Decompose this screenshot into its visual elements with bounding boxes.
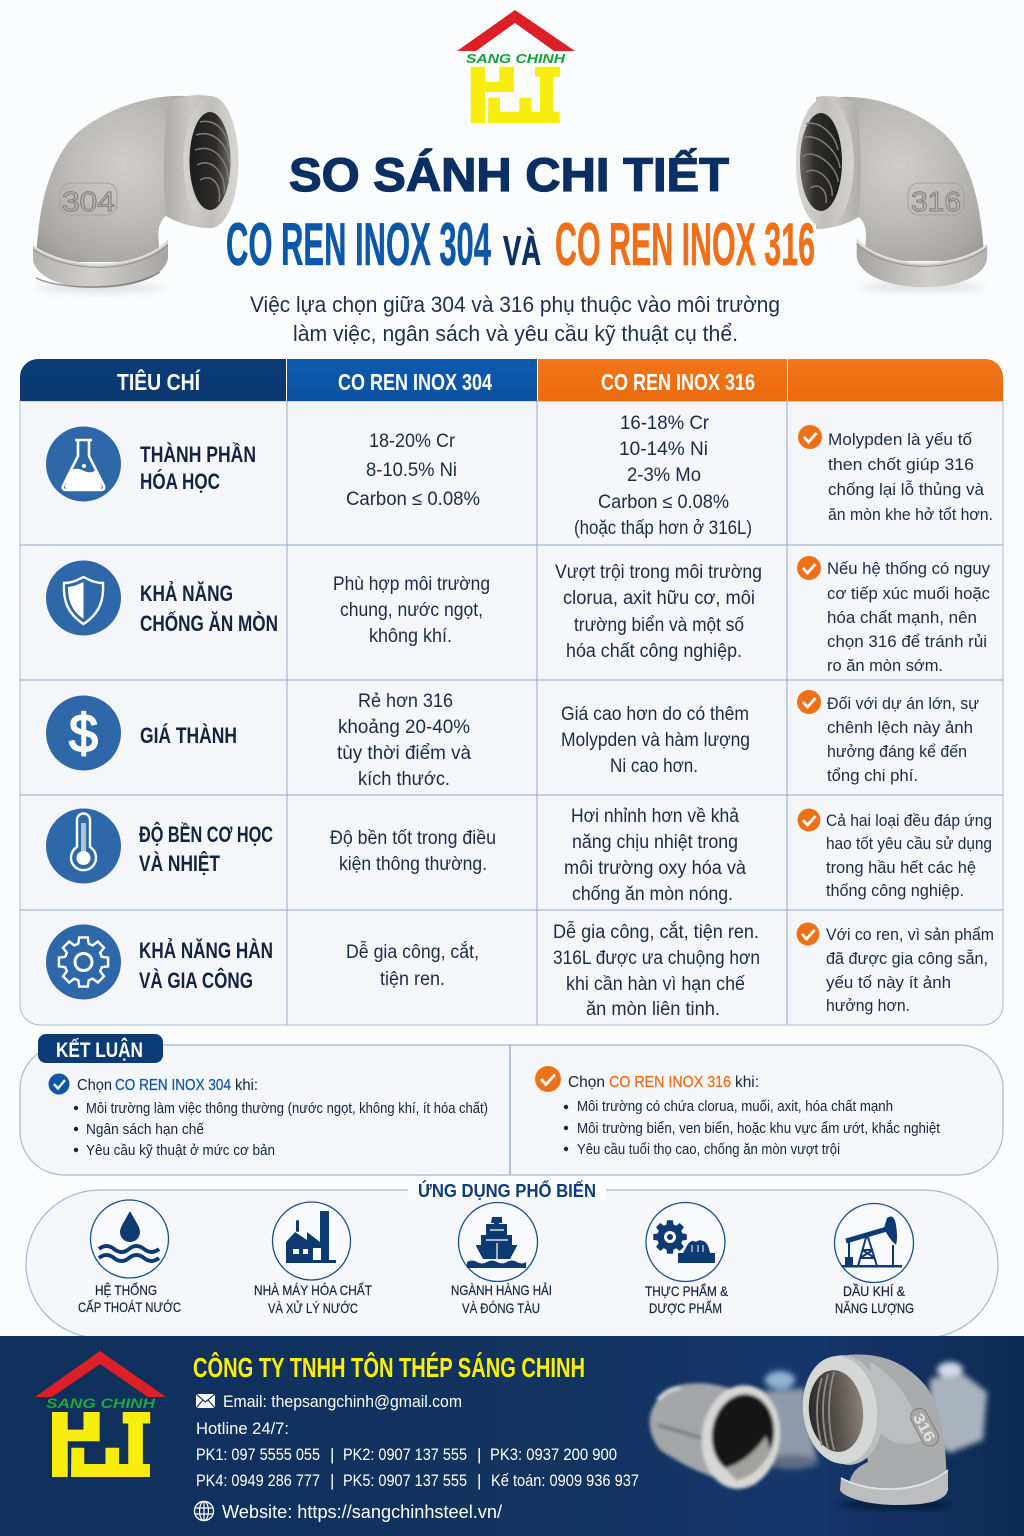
note with check: đã được gia công sẵn, (826, 949, 988, 968)
title: VÀ (503, 227, 541, 274)
row: khả năng hàn và gia công: Dễ gia công, cắt, (346, 941, 479, 963)
company name: CÔNG TY TNHH TÔN THÉP SÁNG CHINH (193, 1351, 585, 1383)
row: khả năng hàn và gia công: VÀ GIA CÔNG (139, 968, 253, 993)
note with check: tổng chi phí. (827, 766, 918, 785)
logo: Sang Chinh top (457, 10, 575, 123)
note with check: then chốt giúp 316 (828, 455, 974, 474)
note with check (797, 556, 990, 675)
application: ship: VÀ ĐÓNG TÀU (462, 1300, 540, 1316)
row: khả năng chống ăn mòn: không khí. (369, 626, 452, 647)
row: thành phần hóa học: THÀNH PHẦN (140, 442, 256, 467)
hotline: | (330, 1471, 334, 1490)
application: water: HỆ THỐNG (95, 1281, 157, 1298)
table header: CO REN INOX 304 (338, 369, 492, 395)
product photo: right elbow 316 (796, 96, 987, 290)
icon: thermometer (46, 808, 121, 884)
note with check: chống lại lỗ thủng và (828, 480, 985, 499)
website: Website: https://sangchinhsteel.vn/ (222, 1502, 502, 1522)
footer logo: SANG CHINH (46, 1395, 156, 1411)
row: giá thành: Rẻ hơn 316 (358, 691, 453, 712)
hotline: PK1: 097 5555 055 (196, 1445, 320, 1464)
email: Email: thepsangchinh@gmail.com (223, 1392, 462, 1411)
row: thành phần hóa học: 18-20% Cr (369, 431, 456, 452)
application: ship: NGÀNH HÀNG HẢI (451, 1282, 552, 1298)
row: độ bền cơ học và nhiệt (46, 806, 992, 905)
row: khả năng chống ăn mòn: clorua, axit hữu cơ, môi (563, 588, 755, 609)
comparison table (20, 359, 1003, 1025)
note with check (796, 922, 994, 1015)
row: thành phần hóa học (46, 413, 993, 539)
application: ship (451, 1202, 552, 1316)
logo: Sang Chinh top: SANG CHINH (466, 51, 566, 66)
note with check (798, 425, 993, 524)
conclusion: chọn 304: Ngân sách hạn chế (86, 1121, 205, 1138)
row: độ bền cơ học và nhiệt: ĐỘ BỀN CƠ HỌC (139, 822, 273, 847)
row: khả năng chống ăn mòn: CHỐNG ĂN MÒN (140, 610, 278, 636)
application: oil and energy (834, 1204, 914, 1316)
product photo: fittings on blue (650, 1351, 987, 1510)
row: độ bền cơ học và nhiệt: năng chịu nhiệt trong (572, 832, 738, 853)
row: khả năng chống ăn mòn: KHẢ NĂNG (140, 581, 233, 606)
note with check: Cả hai loại đều đáp ứng (826, 811, 992, 830)
table header: CO REN INOX 316 (601, 369, 755, 395)
row: khả năng chống ăn mòn (46, 556, 990, 675)
row: khả năng chống ăn mòn: chung, nước ngọt, (340, 600, 483, 621)
application: oil and energy: DẦU KHÍ & (843, 1283, 906, 1299)
hotline: | (477, 1471, 481, 1490)
application: factory: VÀ XỬ LÝ NƯỚC (268, 1299, 358, 1316)
footer (0, 1336, 1024, 1536)
row: giá thành: Molypden và hàm lượng (561, 730, 750, 751)
heading: kết luận (38, 1034, 163, 1063)
hotline: PK4: 0949 286 777 (196, 1471, 320, 1490)
application: oil and energy: NĂNG LƯỢNG (835, 1300, 914, 1316)
panel: kết luận (20, 1034, 1003, 1175)
blurred back fittings (650, 1362, 987, 1494)
row: độ bền cơ học và nhiệt: Hơi nhỉnh hơn về khả (571, 806, 739, 827)
note with check: Đối với dự án lớn, sự (827, 694, 979, 713)
conclusion: chọn 304: Chọn (77, 1077, 112, 1094)
row: khả năng hàn và gia công: ăn mòn liên tinh. (586, 999, 720, 1020)
note with check: Với co ren, vì sản phẩm (826, 925, 994, 944)
note with check: ăn mòn khe hở tốt hơn. (828, 505, 993, 524)
application: food and pharma (645, 1202, 729, 1316)
note with check: cơ tiếp xúc muối hoặc (827, 584, 990, 603)
row: giá thành (46, 690, 979, 790)
hotline (196, 1419, 639, 1490)
row: thành phần hóa học: Carbon ≤ 0.08% (598, 492, 729, 513)
row: khả năng hàn và gia công: KHẢ NĂNG HÀN (139, 938, 273, 963)
note with check: thống công nghiệp. (826, 881, 964, 900)
subtitle: làm việc, ngân sách và yêu cầu kỹ thuật cụ thể. (293, 321, 738, 346)
note with check (798, 808, 992, 900)
conclusion: chọn 316: Chọn (568, 1074, 605, 1091)
hotline: Kế toán: 0909 936 937 (491, 1471, 639, 1490)
main elbow: 316 (909, 1410, 938, 1445)
row: độ bền cơ học và nhiệt: VÀ NHIỆT (139, 851, 220, 876)
row: khả năng chống ăn mòn: Phù hợp môi trường (333, 574, 490, 595)
row: khả năng chống ăn mòn: Vượt trội trong môi trường (555, 562, 762, 583)
row: độ bền cơ học và nhiệt: kiện thông thường. (339, 854, 487, 875)
row: thành phần hóa học: 10-14% Ni (619, 439, 708, 460)
row: khả năng hàn và gia công: Dễ gia công, cắt, tiện ren. (553, 921, 759, 943)
conclusion: chọn 316: khi: (735, 1074, 759, 1091)
application: factory: NHÀ MÁY HÓA CHẤT (254, 1282, 372, 1298)
note with check: trong hầu hết các hệ (826, 858, 976, 877)
row: thành phần hóa học: (hoặc thấp hơn ở 316L) (574, 518, 752, 539)
product photo: right elbow 316: 316 (911, 186, 961, 217)
heading: kết luận: KẾT LUẬN (56, 1038, 143, 1062)
note with check: chênh lệch này ảnh (827, 718, 973, 737)
row: giá thành: Ni cao hơn. (610, 756, 698, 777)
heading: ỨNG DỤNG PHỔ BIẾN (418, 1180, 596, 1201)
row: giá thành: kích thước. (358, 769, 450, 790)
application: water: CẤP THOÁT NƯỚC (78, 1299, 181, 1315)
icon: dollar: $ (69, 704, 98, 764)
product photo: left elbow 304: 304 (62, 186, 115, 217)
conclusion: chọn 304 (48, 1074, 488, 1159)
conclusion: chọn 316: Yêu cầu tuổi thọ cao, chống ăn mòn vượt trội (577, 1141, 840, 1158)
note with check: Nếu hệ thống có nguy (827, 559, 990, 578)
title (226, 148, 815, 278)
hotline: | (330, 1445, 334, 1464)
row: thành phần hóa học: 2-3% Mo (627, 465, 701, 486)
icon: dollar (46, 696, 121, 770)
subtitle: Việc lựa chọn giữa 304 và 316 phụ thuộc vào môi trường (250, 292, 780, 317)
conclusion: chọn 304: CO REN INOX 304 (115, 1077, 231, 1094)
row: giá thành: khoảng 20-40% (338, 717, 470, 738)
icon: shield (46, 560, 121, 636)
conclusion: chọn 316: Môi trường biển, ven biển, hoặc khu vực ẩm ướt, khắc nghiệt (577, 1120, 941, 1137)
hotline: PK5: 0907 137 555 (343, 1471, 467, 1490)
row: thành phần hóa học: Carbon ≤ 0.08% (346, 489, 480, 510)
conclusion: chọn 316: Môi trường có chứa clorua, muối, axit, hóa chất mạnh (577, 1098, 893, 1115)
icon: gear (46, 924, 121, 1000)
note with check: chọn 316 để tránh rủi (827, 632, 987, 651)
conclusion: chọn 304: khi: (235, 1077, 258, 1094)
row: giá thành: tùy thời điểm và (337, 743, 471, 764)
application: food and pharma: THỰC PHẨM & (645, 1282, 729, 1299)
application: water (78, 1200, 181, 1315)
row: khả năng hàn và gia công: khi cần hàn vì hạn chế (566, 974, 745, 995)
table header: TIÊU CHÍ (117, 368, 201, 395)
row: độ bền cơ học và nhiệt: môi trường oxy hóa và (564, 858, 746, 879)
application: food and pharma: DƯỢC PHẨM (649, 1299, 722, 1316)
panel: ứng dụng phổ biến (26, 1180, 998, 1338)
hotline: PK3: 0937 200 900 (490, 1445, 617, 1464)
conclusion: chọn 316 (535, 1066, 941, 1158)
footer logo (35, 1351, 166, 1477)
note with check (797, 690, 979, 785)
main elbow (798, 1351, 951, 1510)
row: khả năng hàn và gia công: tiện ren. (380, 969, 445, 990)
note with check: hao tốt yêu cầu sử dụng (826, 834, 992, 853)
row: thành phần hóa học: 16-18% Cr (620, 413, 710, 434)
note with check: hưởng đáng kể đến (827, 742, 967, 761)
row: độ bền cơ học và nhiệt: chống ăn mòn nóng. (572, 884, 733, 905)
icon: flask (46, 426, 121, 502)
application: factory (254, 1202, 372, 1316)
row: khả năng hàn và gia công (46, 921, 994, 1020)
subtitle (250, 292, 780, 346)
note with check: hưởng hơn. (826, 996, 910, 1015)
conclusion: chọn 304: Môi trường làm việc thông thường (nước ngọt, không khí, ít hóa chất) (86, 1100, 488, 1117)
title: CO REN INOX 304 (226, 211, 491, 278)
hotline: | (477, 1445, 481, 1464)
row: thành phần hóa học: 8-10.5% Ni (366, 460, 457, 481)
row: độ bền cơ học và nhiệt: Độ bền tốt trong điều (330, 828, 496, 849)
title: SO SÁNH CHI TIẾT (289, 148, 729, 201)
table header (20, 359, 1003, 401)
note with check: ro ăn mòn sớm. (827, 656, 943, 675)
hotline: PK2: 0907 137 555 (343, 1445, 467, 1464)
product photo: left elbow 304 (33, 95, 238, 291)
row: giá thành: Giá cao hơn do có thêm (561, 704, 749, 725)
row: thành phần hóa học: HÓA HỌC (140, 469, 220, 494)
note with check: hóa chất mạnh, nên (827, 608, 977, 627)
row: giá thành: GIÁ THÀNH (140, 723, 237, 748)
note with check: Molypden là yếu tố (828, 430, 973, 449)
hotline: Hotline 24/7: (196, 1419, 289, 1438)
row: khả năng chống ăn mòn: hóa chất công nghiệp. (566, 641, 742, 662)
conclusion: chọn 316: CO REN INOX 316 (609, 1074, 731, 1091)
row: khả năng hàn và gia công: 316L được ưa chuộng hơn (553, 948, 760, 969)
conclusion: chọn 304: Yêu cầu kỹ thuật ở mức cơ bản (86, 1142, 275, 1159)
note with check: yếu tố này ít ảnh (826, 973, 951, 992)
row: khả năng chống ăn mòn: trường biển và một số (574, 615, 744, 636)
